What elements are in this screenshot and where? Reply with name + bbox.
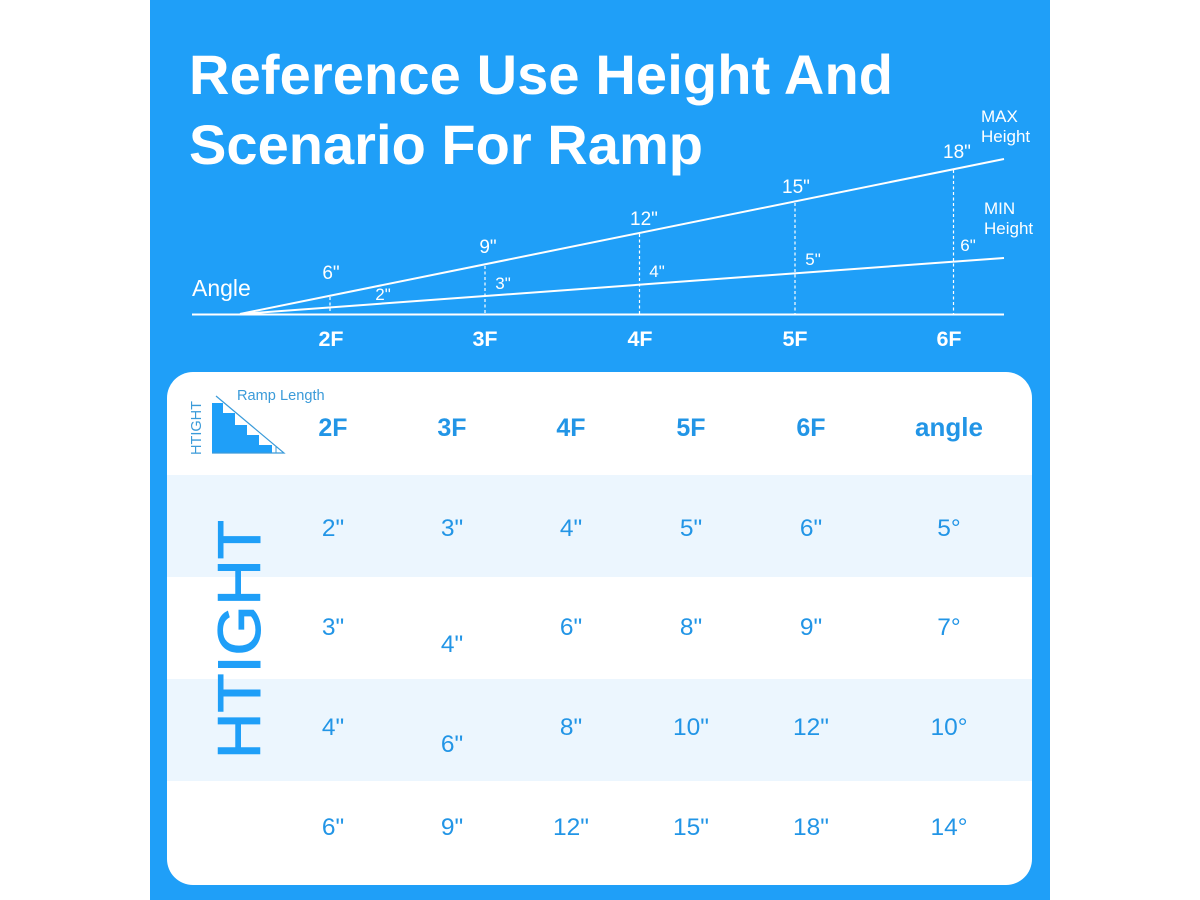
- min height label: [984, 199, 1033, 238]
- min height values: 4": [649, 262, 665, 281]
- length axis labels: 3F: [472, 327, 498, 351]
- max height values: 15": [782, 177, 810, 198]
- table row 4: 9": [441, 814, 463, 841]
- max height label: Height: [981, 127, 1030, 146]
- table row 3: 10": [673, 714, 709, 741]
- table card: [167, 372, 1032, 885]
- length axis labels: 5F: [782, 327, 808, 351]
- table row 3: 10°: [930, 714, 968, 741]
- baseline and ramp lines: [192, 159, 1004, 314]
- max height values: 18": [943, 142, 971, 163]
- min height label: MIN: [984, 199, 1015, 218]
- table header: angle: [915, 412, 983, 442]
- max height label: [981, 107, 1030, 146]
- table header: 4F: [556, 414, 586, 442]
- max height label: MAX: [981, 107, 1018, 126]
- title: [189, 43, 893, 176]
- table row 3: 8": [560, 714, 582, 741]
- angle label: Angle: [192, 275, 251, 301]
- table row 4: 6": [322, 814, 344, 841]
- table header: 6F: [796, 414, 826, 442]
- title: Reference Use Height And: [189, 43, 893, 106]
- table row 2: 9": [800, 614, 822, 641]
- max height values: 6": [322, 263, 340, 284]
- table row 4: 15": [673, 814, 709, 841]
- small vertical height label: HTIGHT: [188, 401, 205, 455]
- max height values: 9": [479, 237, 497, 258]
- ramp length label: Ramp Length: [237, 388, 325, 404]
- title: Scenario For Ramp: [189, 113, 703, 176]
- table row 3: 6": [441, 731, 463, 758]
- table header: 3F: [437, 414, 467, 442]
- table row 3: 4": [322, 714, 344, 741]
- icon: stair ramp: [212, 396, 284, 453]
- table header: 2F: [318, 414, 348, 442]
- table header: [318, 412, 983, 442]
- table row 1: 5": [680, 515, 702, 542]
- table row 4: [322, 814, 968, 841]
- table header: 5F: [676, 414, 706, 442]
- min height values: 5": [805, 250, 821, 269]
- large vertical height label: HTIGHT: [206, 520, 273, 759]
- length axis labels: 2F: [318, 327, 344, 351]
- table row 2: [322, 614, 961, 658]
- table row 3: [322, 714, 968, 758]
- table row 1: 4": [560, 515, 582, 542]
- max height values: 12": [630, 209, 658, 230]
- length axis labels: 6F: [936, 327, 962, 351]
- table row 1: 2": [322, 515, 344, 542]
- table row 4: 14°: [930, 814, 968, 841]
- table row 1: 6": [800, 515, 822, 542]
- table row 2: 3": [322, 614, 344, 641]
- length axis labels: 4F: [627, 327, 653, 351]
- table row 2: 4": [441, 631, 463, 658]
- table row 4: 12": [553, 814, 589, 841]
- table row 4: 18": [793, 814, 829, 841]
- ramp angle diagram: [192, 107, 1033, 351]
- striped rows: [167, 475, 1032, 781]
- table row 1: 3": [441, 515, 463, 542]
- min height label: Height: [984, 219, 1033, 238]
- table row 3: 12": [793, 714, 829, 741]
- min height values: 6": [960, 236, 976, 255]
- min height values: 3": [495, 274, 511, 293]
- table row 2: 6": [560, 614, 582, 641]
- table row 2: 7°: [937, 614, 961, 641]
- table row 1: [322, 515, 961, 542]
- blue background panel: [150, 0, 1050, 900]
- min height values: 2": [375, 285, 391, 304]
- max height values: [322, 142, 971, 284]
- dashed height markers: [330, 170, 954, 314]
- table row 1: 5°: [937, 515, 961, 542]
- table row 2: 8": [680, 614, 702, 641]
- length axis labels: [318, 327, 962, 351]
- min height values: [375, 236, 976, 304]
